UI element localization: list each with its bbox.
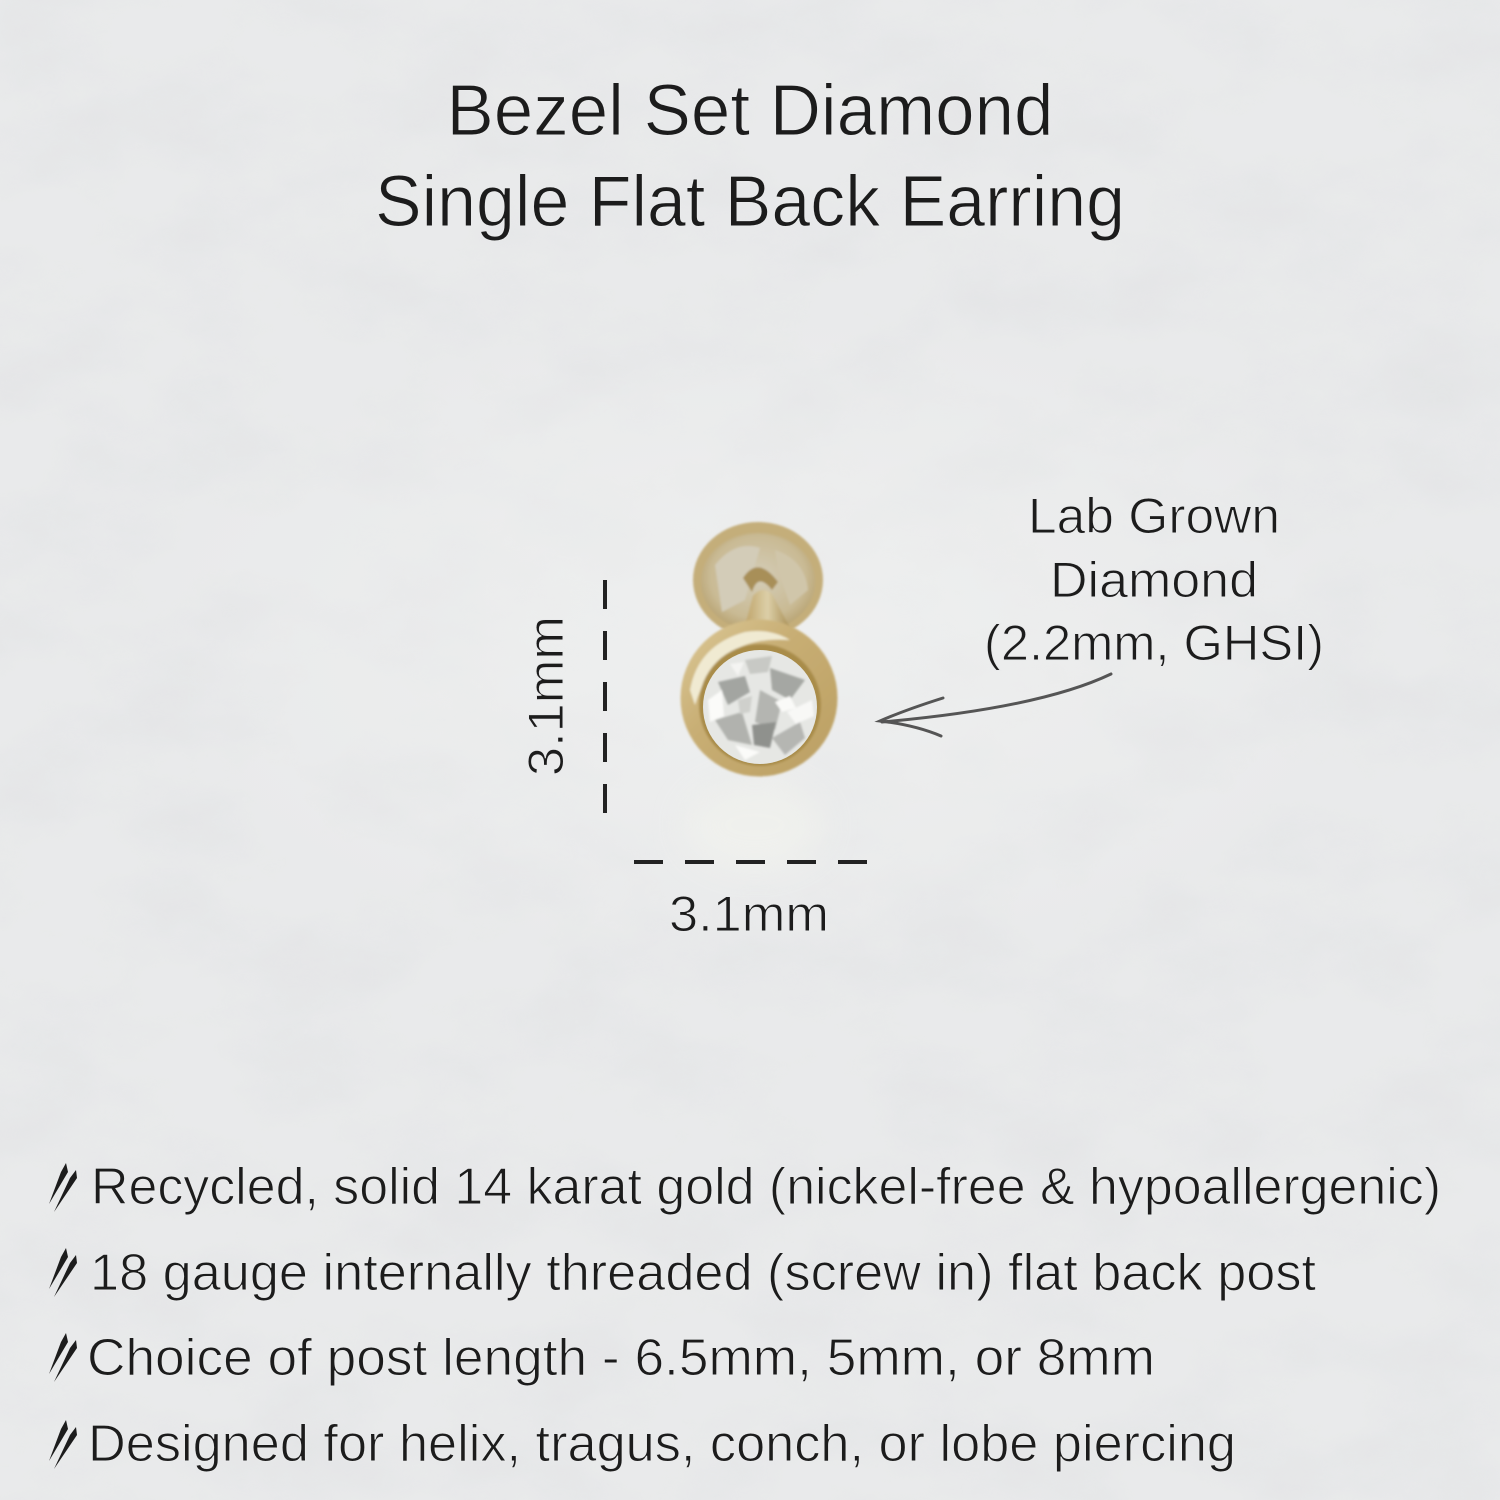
feature list (49, 1158, 1441, 1473)
width dimension: 3.1mm: 3.1mm (669, 886, 829, 942)
callout: lab grown diamond: (2.2mm, GHSI) (984, 615, 1324, 671)
earring back disc (693, 522, 823, 638)
bezel setting (680, 620, 838, 776)
bullet 3: post length: Choice of post length - 6.5mm, 5mm, or 8mm (87, 1329, 1155, 1387)
title: Bezel Set Diamond (446, 71, 1054, 151)
title: Single Flat Back Earring (375, 162, 1125, 242)
arrow to diamond (880, 674, 1111, 736)
earring photo (680, 522, 838, 870)
reflection under earring (685, 780, 825, 870)
height dimension: 3.1mm: 3.1mm (518, 616, 574, 776)
callout: lab grown diamond (984, 488, 1324, 671)
bullet 2: gauge: 18 gauge internally threaded (screw in) flat back post (90, 1244, 1317, 1302)
bullet 1: gold: Recycled, solid 14 karat gold (nickel-free & hypoallergenic) (91, 1158, 1441, 1216)
callout: lab grown diamond: Lab Grown (1028, 488, 1280, 544)
callout: lab grown diamond: Diamond (1050, 552, 1258, 608)
title (375, 71, 1125, 242)
bullet 4: piercing: Designed for helix, tragus, conch, or lobe piercing (88, 1415, 1236, 1473)
lab grown diamond stone (703, 650, 817, 764)
earring post (745, 590, 790, 628)
